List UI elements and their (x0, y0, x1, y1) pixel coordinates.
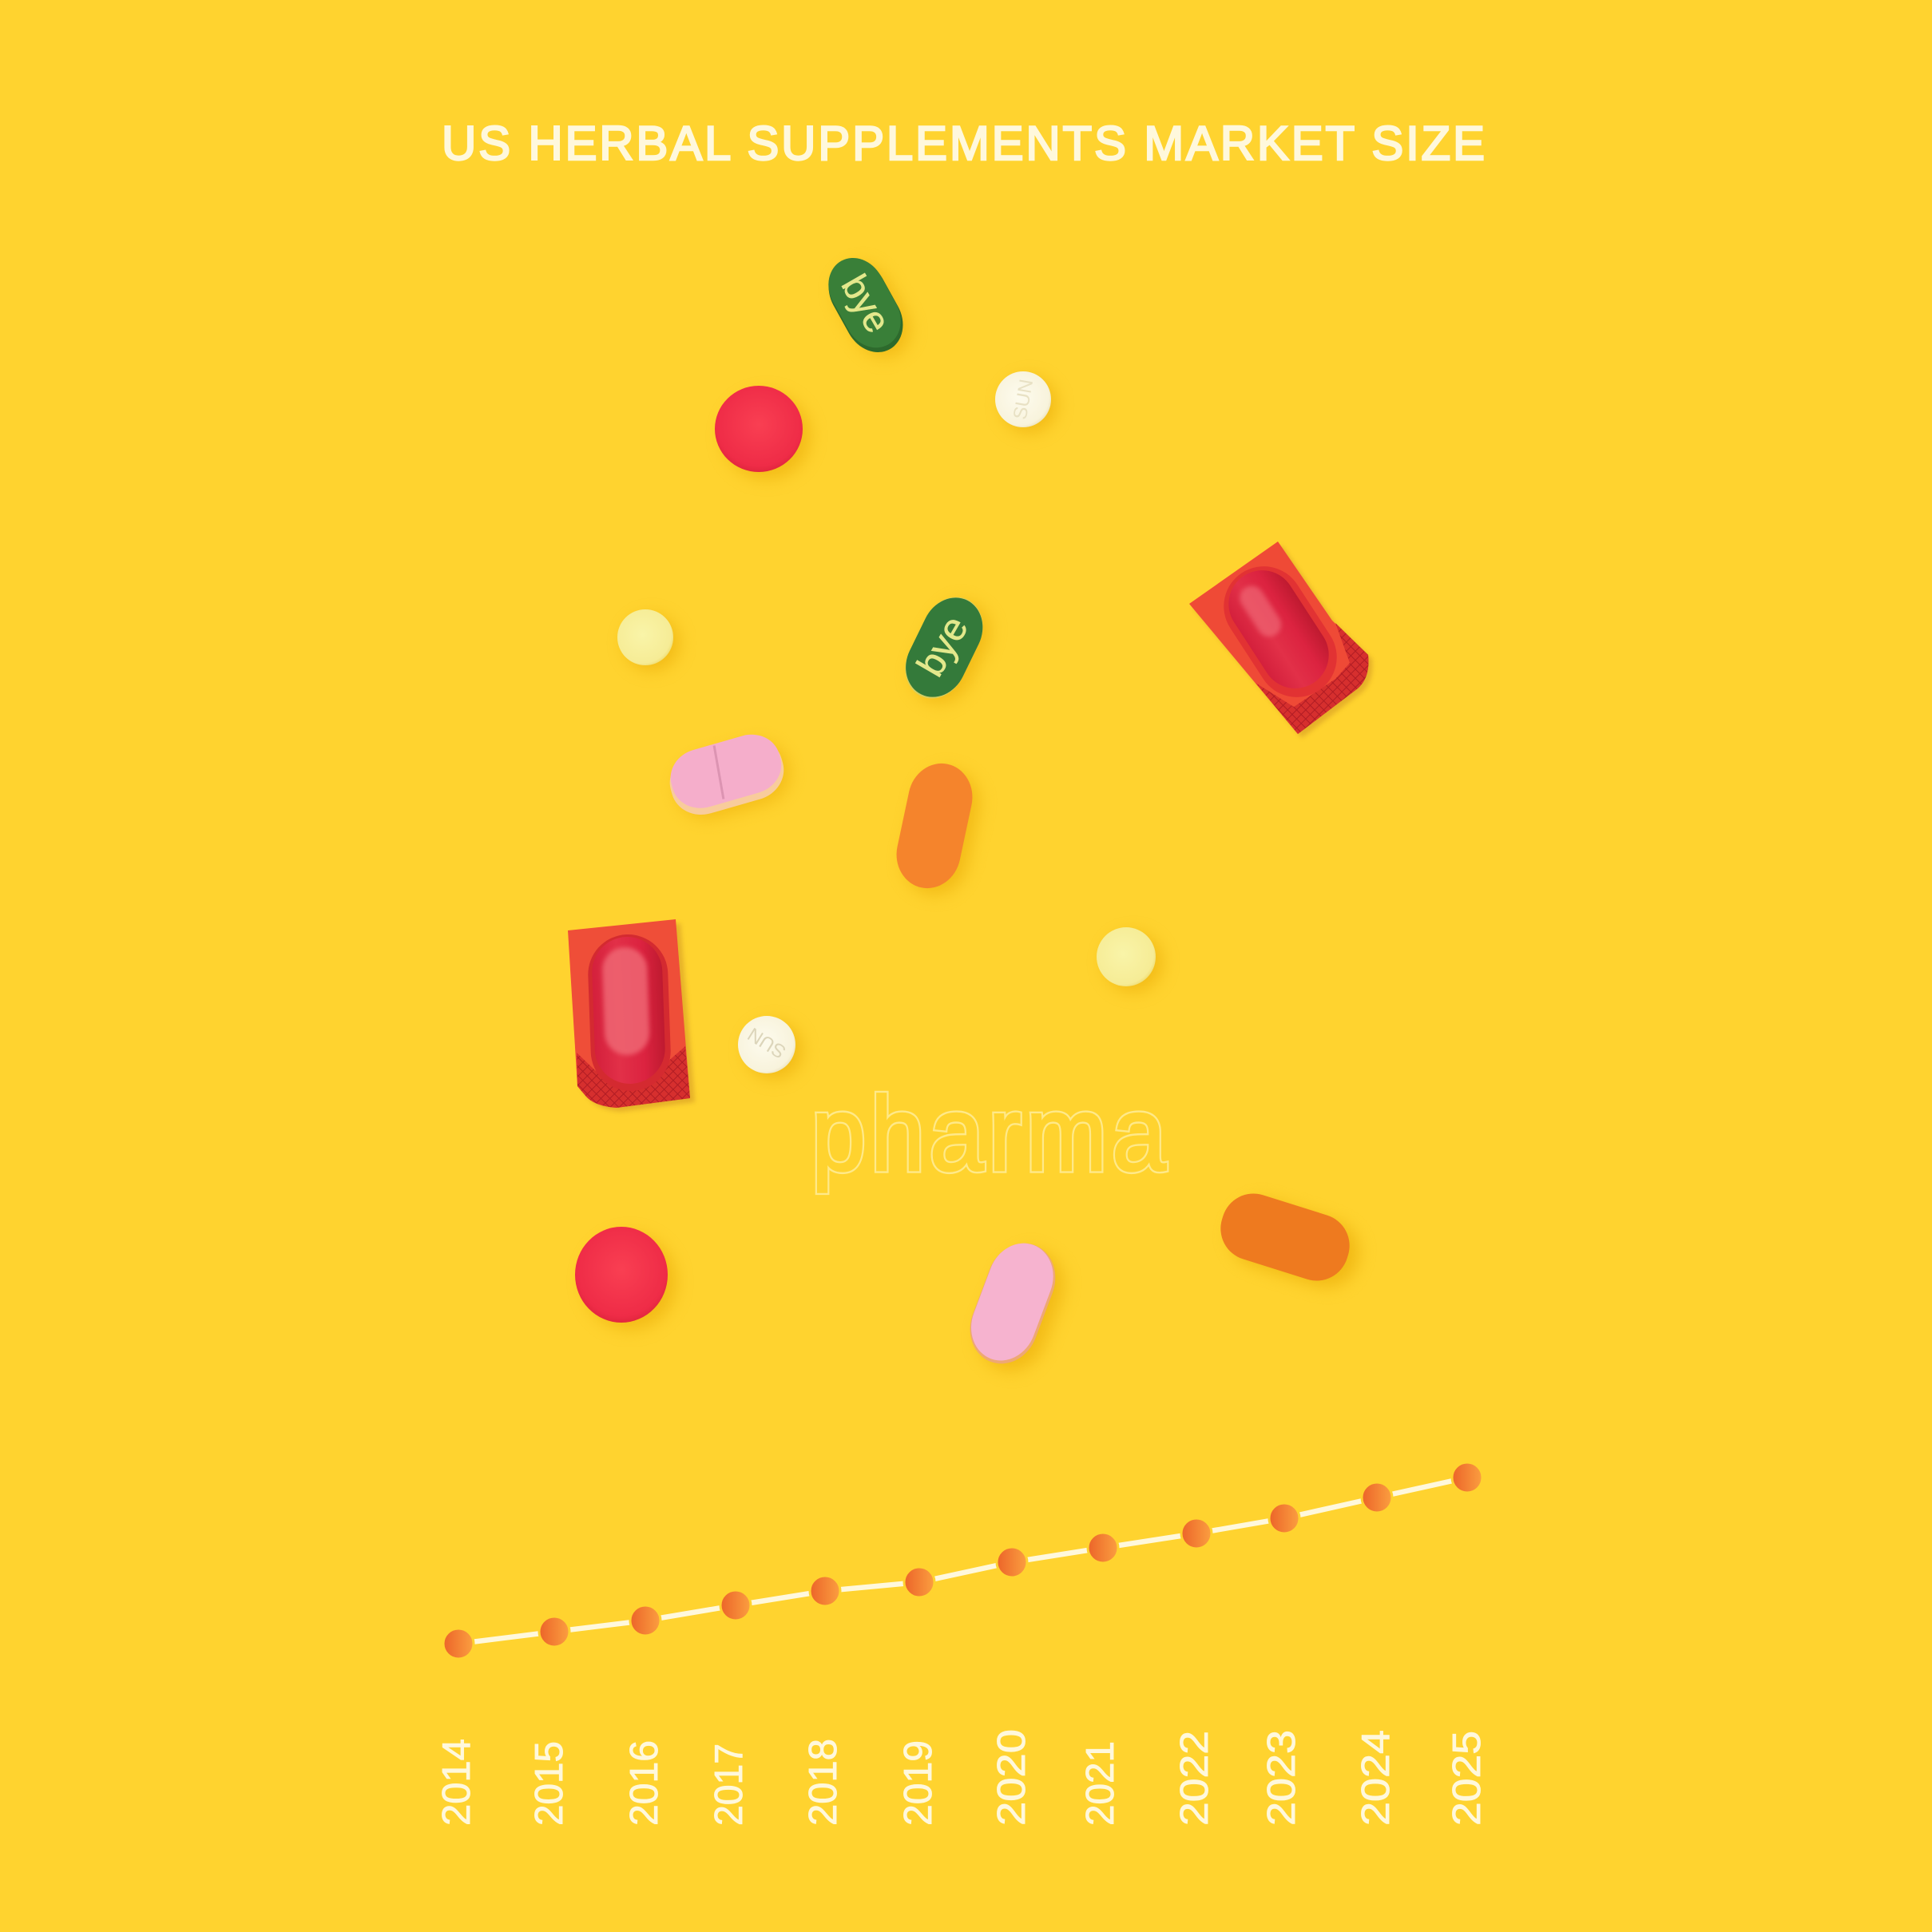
pill: lemon round right (1097, 927, 1163, 992)
pill: white SUN top (995, 371, 1057, 433)
pill: red round bottom (575, 1227, 676, 1330)
year axis labels (435, 1729, 1489, 1826)
pill: pink bottom (959, 1233, 1075, 1381)
year axis labels: 2025 (1446, 1731, 1489, 1826)
year axis labels: 2017 (708, 1744, 751, 1826)
data points (443, 1462, 1482, 1659)
pills illustration (568, 248, 1372, 1381)
blister pack: right (1189, 542, 1372, 738)
year axis labels: 2014 (435, 1739, 478, 1826)
watermark: pharma: pharma (811, 1075, 1166, 1192)
line chart: market size 2014-2025 (443, 1462, 1482, 1659)
year axis labels: 2023 (1260, 1730, 1303, 1826)
title: US HERBAL SUPPLEMENTS MARKET SIZE (442, 117, 1485, 170)
pill: white SUN lower: SUN (744, 1023, 790, 1062)
pill: green bye top: bye (834, 268, 899, 339)
year axis labels: 2015 (528, 1741, 571, 1826)
year axis labels: 2018 (802, 1739, 845, 1826)
pill: lemon round left (617, 609, 680, 671)
watermark: pharma: pharma (811, 1075, 1166, 1192)
year axis labels: 2022 (1173, 1731, 1216, 1826)
trend line (458, 1478, 1467, 1644)
year axis labels: 2021 (1079, 1741, 1122, 1826)
blister pack: left (568, 919, 695, 1112)
pill: orange bottom (1212, 1185, 1367, 1295)
year axis labels: 2024 (1355, 1730, 1398, 1826)
pill: red round top (715, 386, 811, 479)
pill: white SUN lower (738, 1016, 803, 1079)
year axis labels: 2016 (623, 1740, 666, 1826)
pill: green bye centre (894, 587, 1002, 713)
pill: pink scored (663, 728, 797, 826)
pill: green bye top (817, 248, 922, 367)
year axis labels: 2019 (897, 1740, 940, 1826)
pill: green bye centre: bye (909, 609, 977, 684)
year axis labels: 2020 (990, 1729, 1033, 1826)
pill: white SUN top: SUN (1010, 378, 1037, 421)
pill: orange centre (890, 757, 986, 901)
